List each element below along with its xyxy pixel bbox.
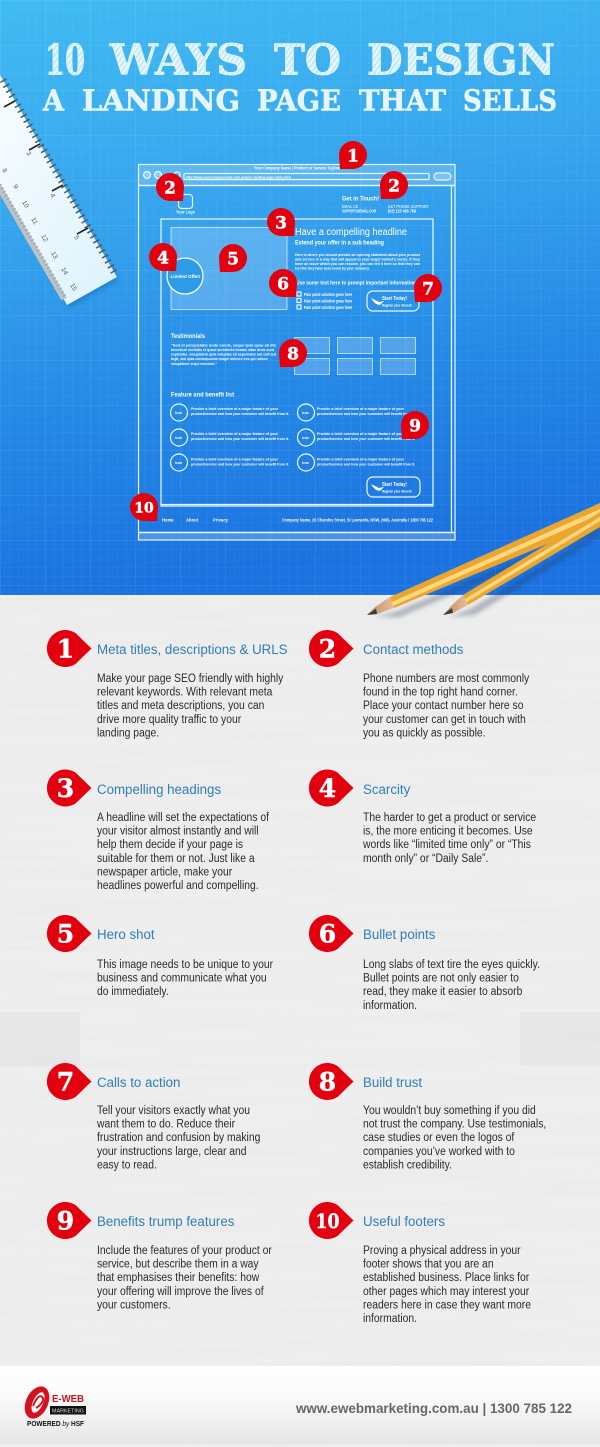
item 5: hero shot (47, 915, 273, 998)
title: SELLS (463, 84, 557, 118)
title: WAYS (109, 36, 247, 84)
heading 8: Build trust (363, 1075, 422, 1090)
icon: ruler: 12 (39, 234, 49, 244)
title (42, 36, 557, 118)
body 3: suitable for them or not. Just like a (97, 852, 255, 865)
icon: ruler: 13 (49, 250, 59, 261)
marker pins on the wireframe (130, 141, 442, 521)
body 4: words like “limited time only” or “This (362, 839, 531, 851)
body 5: business and communicate what you (97, 972, 267, 985)
logo placeholder (176, 194, 195, 214)
body 10: readers here in case they want more (363, 1299, 531, 1312)
body 10: established business. Place links for (363, 1272, 530, 1284)
pin 2 contact: 2 (388, 176, 400, 196)
pin 8 (279, 339, 307, 367)
pin 1: 1 (347, 146, 359, 166)
badge 6: 6 (319, 920, 336, 948)
pin 5: 5 (227, 250, 239, 270)
pin 7 (414, 274, 442, 302)
feature and benefit list: Icon (175, 461, 182, 465)
feature and benefit list: product/service and how your customer will benefit from it. (317, 411, 415, 416)
body 1: Make your page SEO friendly with highly (97, 673, 284, 685)
pin 6 (269, 269, 297, 297)
badge 9: 9 (57, 1206, 74, 1236)
badge 1 (47, 630, 92, 667)
panel: landing page wireframe (138, 164, 455, 540)
pin 9 (401, 411, 429, 439)
body 4: is, the more enticing it becomes. Use (363, 825, 533, 838)
badge 8: 8 (319, 1068, 336, 1096)
main content frame (161, 219, 433, 506)
pin 9: 9 (409, 416, 421, 436)
badge 10 (309, 1202, 354, 1239)
contact details: Get in Touch! (342, 196, 379, 202)
heading 9: Benefits trump features (97, 1214, 235, 1229)
feature and benefit list: product/service and how your customer will benefit from it. (191, 462, 289, 466)
bullet points: Pain point solution goes here (304, 292, 353, 297)
body 9: your offering will improve the lives of (97, 1285, 265, 1298)
feature and benefit list: product/service and how your customer will benefit from it. (317, 462, 415, 466)
feature and benefit list: Provide a brief overview of a major feature of your (191, 456, 278, 462)
limited offer circle (167, 258, 203, 294)
testimonials: voluptatem sequi nesciunt." (171, 361, 217, 366)
body 3 (97, 812, 270, 892)
pin 4 (149, 243, 177, 271)
wireframe footer: Home (162, 518, 174, 522)
limited offer circle: Limited Offer! (170, 274, 201, 280)
body 10: information. (363, 1313, 417, 1325)
pin 2 contact (380, 171, 408, 199)
pin 6: 6 (277, 274, 289, 294)
feature and benefit list: Icon (175, 411, 182, 415)
body 10: other pages which may interest your (363, 1285, 530, 1298)
testimonials: explicabo. voluptatem quia voluptas sit aspernatur aut odit aut (171, 352, 277, 356)
panel: footer bar (0, 1366, 600, 1444)
pin 10 (130, 493, 158, 521)
browser window frame (138, 164, 455, 540)
body 6: read, they make it easier to absorb (363, 986, 522, 998)
pin 4: 4 (157, 248, 169, 268)
badge 7 (47, 1063, 92, 1100)
heading 3: Compelling headings (97, 782, 221, 797)
pin 7: 7 (422, 280, 434, 300)
testimonials: Testimonials (171, 334, 206, 340)
body 1: drive more quality traffic to your (97, 713, 241, 726)
pin 10: 10 (134, 500, 154, 516)
body 7: your instructions large, clear and (97, 1145, 247, 1158)
page title and URL text: http://www.yourcompanyname.com.au/your-landing-page-name.html (186, 174, 291, 179)
heading 5: Hero shot (97, 927, 155, 942)
feature and benefit list: Provide a brief overview of a major feature of your (317, 406, 404, 411)
badge 4: 4 (319, 774, 336, 803)
feature and benefit list: Provide a brief overview of a major feature of your (191, 406, 278, 411)
compelling headline: Use some text here to prompt important information (296, 280, 416, 286)
body 5: do immediately. (97, 986, 169, 998)
body 3: headlines powerful and compelling. (97, 880, 259, 892)
feature and benefit list: product/service and how your customer will benefit from it. (191, 411, 289, 416)
testimonials: Inventore veritatis et quasi architecto beatae vitae dicta sunt (171, 347, 275, 352)
body 2: your customer can get in touch with (363, 713, 526, 726)
body 5 (97, 959, 273, 998)
item 3: compelling headings (47, 770, 270, 892)
item 1: meta titles (47, 630, 288, 740)
body 7: Tell your visitors exactly what you (97, 1105, 250, 1117)
icon: ruler: 3 (24, 150, 32, 157)
body 2: Phone numbers are most commonly (363, 673, 530, 685)
badge 8 (309, 1063, 354, 1100)
body 1: landing page. (97, 727, 159, 740)
wireframe footer: Company Name, 20 Chandos Street, St Leonards, NSW, 2065, Australia / 1300 785 122 (282, 518, 434, 522)
title: 10 (45, 36, 85, 84)
second call to action button: Start Today! (382, 482, 407, 488)
body 1: relevant keywords. With relevant meta (97, 686, 273, 699)
testimonials: "Sed ut perspiciatis unde omnis, eaque ipsa quae ab illo (171, 342, 277, 348)
body 7 (96, 1105, 260, 1172)
testimonials: fugit, sed quia consequuntur magni dolores eos qui ratione (171, 356, 269, 361)
compelling headline: Here is where you should provide an opening statement about your product (295, 252, 421, 257)
feature and benefit list: Icon (175, 436, 182, 440)
body 8 (363, 1105, 546, 1172)
pencil two (443, 512, 600, 615)
bullet points: Pain point solution goes here (304, 298, 353, 304)
body 8: companies you’ve worked with to (363, 1145, 515, 1158)
body 8: establish credibility. (363, 1159, 452, 1172)
body 3: help them decide if your page is (97, 839, 244, 851)
item 6: bullet points (309, 915, 540, 1012)
logo: E-Web Marketing: POWERED by HSF (27, 1421, 85, 1428)
icon: ruler: 9 (11, 184, 19, 190)
body 9: that emphasises their benefits: how (97, 1272, 259, 1284)
icon: ruler: 11 (29, 216, 39, 226)
client logo placeholders (294, 338, 416, 374)
icon: ruler: 10 (20, 200, 30, 210)
logo placeholder: Your Logo (176, 210, 195, 214)
compelling headline: feel like they have been heard by your company (295, 266, 370, 270)
badge 4 (309, 770, 354, 806)
wireframe footer (162, 518, 434, 522)
body 10 (363, 1245, 531, 1325)
item 8: build trust (309, 1063, 546, 1172)
feature and benefit list: product/service and how your customer will benefit from it. (317, 436, 415, 441)
heading 7: Calls to action (97, 1075, 180, 1090)
second call to action button (367, 477, 420, 497)
badge 2 (309, 630, 354, 667)
testimonials (171, 334, 277, 366)
page title and URL text: Your Company Name | Product or Service Tagline (254, 166, 340, 170)
icon: ruler (0, 75, 119, 308)
badge 3 (47, 770, 92, 806)
body 10: Proving a physical address in your (363, 1245, 521, 1257)
pin 3 (267, 208, 295, 236)
title: DESIGN (367, 36, 555, 84)
website and phone: www.ewebmarketing.com.au | 1300 785 122 (295, 1401, 572, 1416)
body 5: This image needs to be unique to your (97, 959, 273, 971)
heading 6: Bullet points (363, 927, 436, 942)
badge 2: 2 (319, 634, 336, 664)
body 6: information. (363, 999, 417, 1012)
badge 10: 10 (316, 1209, 340, 1233)
feature and benefit list: Icon (302, 411, 309, 415)
feature and benefit list: Provide a brief overview of a major feature of your (317, 431, 404, 436)
pin 2 logo: 2 (164, 178, 176, 198)
pin 2 logo (156, 173, 184, 201)
body 4 (362, 812, 536, 865)
item 9: benefits trump features (47, 1202, 272, 1312)
heading 4: Scarcity (363, 782, 410, 797)
contact details (342, 196, 429, 214)
icon: ruler: 14 (59, 266, 69, 277)
icon: ruler: 15 (68, 282, 78, 293)
body 9: service, but describe them in a way (97, 1258, 259, 1271)
pencil shadow (375, 525, 600, 617)
feature and benefit list: Feature and benefit list (171, 392, 234, 398)
body 1 (97, 673, 284, 740)
body 1: titles and meta descriptions, you can (97, 700, 264, 712)
item 2: contact methods (309, 630, 530, 740)
title: TO (274, 36, 341, 84)
item 10: useful footers (309, 1202, 531, 1325)
pin 3: 3 (275, 214, 287, 234)
body 2: you as quickly as possible. (363, 727, 486, 740)
icon: ruler: 4 (48, 192, 56, 199)
body 3: your visitor almost instantly and will (97, 825, 259, 838)
panel: blueprint background (0, 0, 600, 595)
wireframe footer: Privacy (213, 518, 229, 522)
bullet points: Pain point solution goes here (304, 305, 353, 310)
pin 5 (219, 244, 247, 272)
compelling headline: Extend your offer in a sub heading (295, 240, 384, 246)
badge 5: 5 (57, 920, 74, 948)
title: PAGE (257, 84, 341, 118)
logo: E-Web Marketing: MARKETING (52, 1408, 84, 1414)
body 7: frustration and confusion by making (97, 1132, 260, 1144)
body 7: easy to read. (97, 1159, 157, 1172)
body 9 (97, 1245, 272, 1312)
feature and benefit list: Icon (302, 461, 309, 465)
body 9: Include the features of your product or (97, 1245, 272, 1257)
icon: pencils (367, 503, 600, 617)
body 3: A headline will set the expectations of (97, 812, 270, 824)
contact details: 24/7 PHONE SUPPORT (388, 204, 429, 209)
hero shot placeholder (171, 228, 287, 310)
heading 1: Meta titles, descriptions & URLS (97, 642, 288, 657)
body 6 (363, 959, 540, 1012)
bullet points (297, 292, 353, 310)
feature and benefit list: product/service and how your customer will benefit from it. (191, 436, 289, 441)
body 6: Long slabs of text tire the eyes quickly. (363, 959, 540, 971)
badge 5 (47, 915, 92, 952)
call to action button: Register your interest! (382, 304, 412, 308)
body 9: your customers. (97, 1299, 171, 1312)
contact details: SUPPORT@EMAIL.COM (342, 208, 376, 214)
compelling headline: and service in a way that will appeal to your target market's needs. If they (295, 256, 421, 262)
feature and benefit list: Provide a brief overview of a major feature of your (191, 431, 278, 436)
contact details: (02) 123 456 789 (388, 208, 417, 214)
feature and benefit list: Provide a brief overview of a major feature of your (317, 456, 404, 462)
logo: E-Web Marketing: E-WEB (52, 1394, 84, 1405)
body 8: not trust the company. Use testimonials, (363, 1118, 546, 1131)
icon: ruler: 5 (72, 234, 80, 241)
compelling headline: Have a compelling headline (295, 227, 407, 238)
icon: ruler: 8 (0, 168, 8, 174)
title: THAT (359, 84, 446, 118)
body 10: footer shows that you are an (363, 1258, 494, 1271)
feature and benefit list: Icon (302, 436, 309, 440)
body 7: want them to do. Reduce their (96, 1118, 235, 1131)
compelling headline: have an issue which you can resolve, you can tell it here so that they can (295, 261, 421, 266)
badge 9 (47, 1202, 92, 1239)
body 8: You wouldn’t buy something if you did (363, 1105, 536, 1117)
badge 3: 3 (57, 774, 74, 803)
body 3: newspaper article, make your (97, 866, 232, 879)
body 4: month only” or “Daily Sale”. (363, 852, 488, 865)
title: LANDING (82, 84, 240, 118)
pencil one (367, 503, 600, 615)
wireframe footer: About (186, 518, 199, 522)
contact details: EMAIL US (342, 204, 358, 209)
page title and URL text (186, 166, 340, 179)
body 2 (363, 673, 530, 740)
pin 1 (339, 141, 367, 169)
item 4: scarcity (309, 770, 536, 865)
heading 2: Contact methods (363, 642, 464, 657)
heading 10: Useful footers (363, 1214, 445, 1229)
feature and benefit list (170, 392, 415, 471)
call to action button: Start Today! (382, 296, 407, 302)
pin 8: 8 (287, 344, 299, 364)
badge 6 (309, 915, 354, 952)
badge 1: 1 (57, 634, 74, 664)
panel: wood background (0, 595, 600, 1447)
body 6: Bullet points are not only easier to (363, 972, 519, 985)
item 7: calls to action (47, 1063, 260, 1172)
logo: E-Web Marketing (20, 1382, 86, 1428)
title: A (42, 84, 64, 118)
compelling headline (295, 227, 421, 286)
body 2: Place your contact number here so (363, 700, 523, 712)
body 4: The harder to get a product or service (363, 812, 536, 824)
body 2: found in the top right hand corner. (363, 686, 518, 699)
body 8: case studies or even the logos of (363, 1132, 515, 1144)
call to action button (367, 291, 419, 311)
badge 7: 7 (57, 1068, 74, 1096)
second call to action button: Register your interest! (382, 490, 412, 494)
